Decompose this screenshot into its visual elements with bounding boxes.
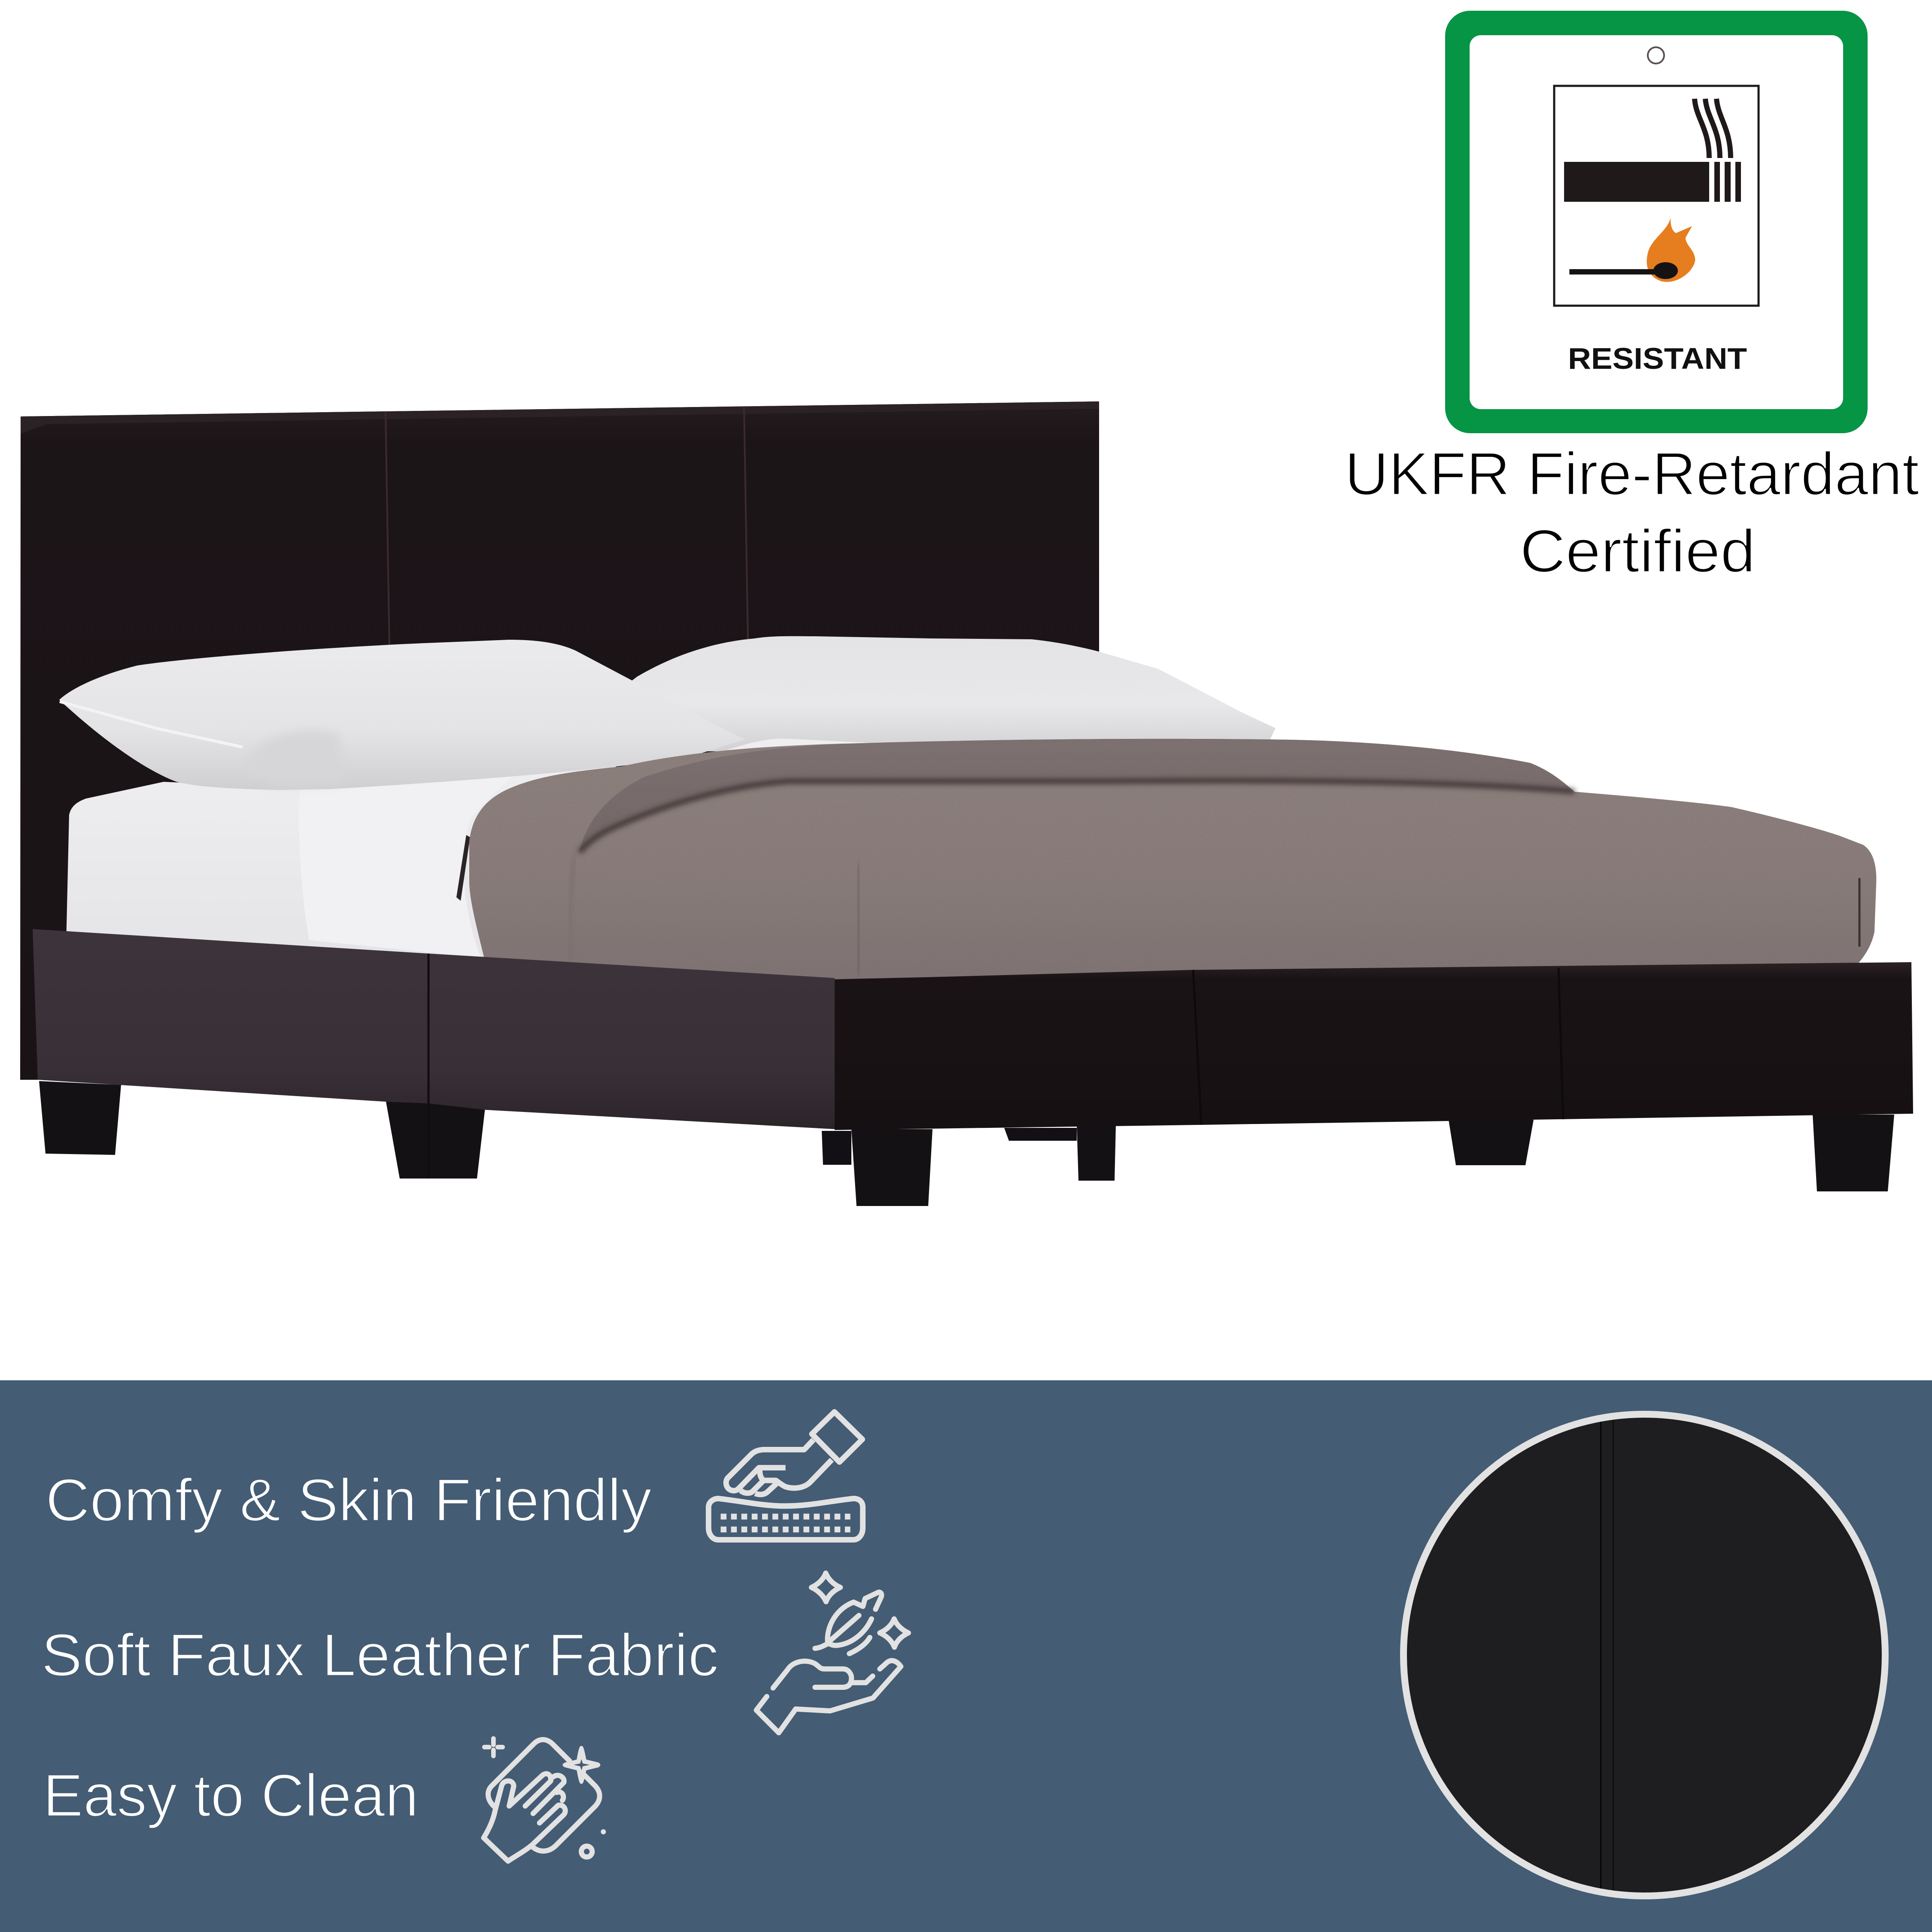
badge hole bbox=[1648, 47, 1664, 64]
icon: hand on mattress bbox=[708, 1412, 863, 1540]
blanket end pleat bbox=[1858, 878, 1861, 947]
icon: hand wiping cloth bbox=[484, 1738, 606, 1861]
feature text: soft: Soft Faux Leather Fabric bbox=[41, 1621, 719, 1689]
blanket upper roll bbox=[580, 739, 1574, 852]
sheet between pillows bbox=[727, 738, 869, 760]
blanket bbox=[469, 739, 1876, 983]
certification caption: UKFR Fire-Retardant bbox=[1345, 440, 1919, 507]
feature text: easy to clean: Easy to Clean bbox=[43, 1762, 419, 1829]
headboard bbox=[20, 401, 1099, 1080]
fitted white sheet bbox=[66, 766, 617, 970]
legs bbox=[39, 1081, 1894, 1206]
certification caption bbox=[1345, 440, 1919, 585]
certification caption: Certified bbox=[1520, 517, 1756, 585]
blanket crease bbox=[857, 864, 860, 975]
fire-retardant certification badge bbox=[1445, 11, 1868, 433]
bed frame side rail bbox=[33, 929, 835, 1179]
badge white panel bbox=[1470, 35, 1843, 409]
badge green frame bbox=[1445, 11, 1868, 433]
symbol box bbox=[1554, 86, 1759, 306]
bed frame foot rail bbox=[835, 962, 1913, 1130]
bed product image bbox=[20, 401, 1913, 1206]
back legs bbox=[822, 1128, 1077, 1165]
bottom feature panel bbox=[0, 1380, 1932, 1932]
icon: lit match bbox=[1569, 217, 1695, 282]
icon: cigarette bbox=[1564, 99, 1741, 202]
right pillow bbox=[601, 636, 1276, 751]
feature text: comfy: Comfy & Skin Friendly bbox=[46, 1466, 652, 1534]
badge label: RESISTANT bbox=[1568, 342, 1747, 375]
left pillow bbox=[59, 640, 745, 790]
blanket shadow line bbox=[580, 781, 1574, 852]
leather swatch circle bbox=[1403, 1408, 1885, 1902]
icon: feather over hand bbox=[756, 1573, 908, 1733]
